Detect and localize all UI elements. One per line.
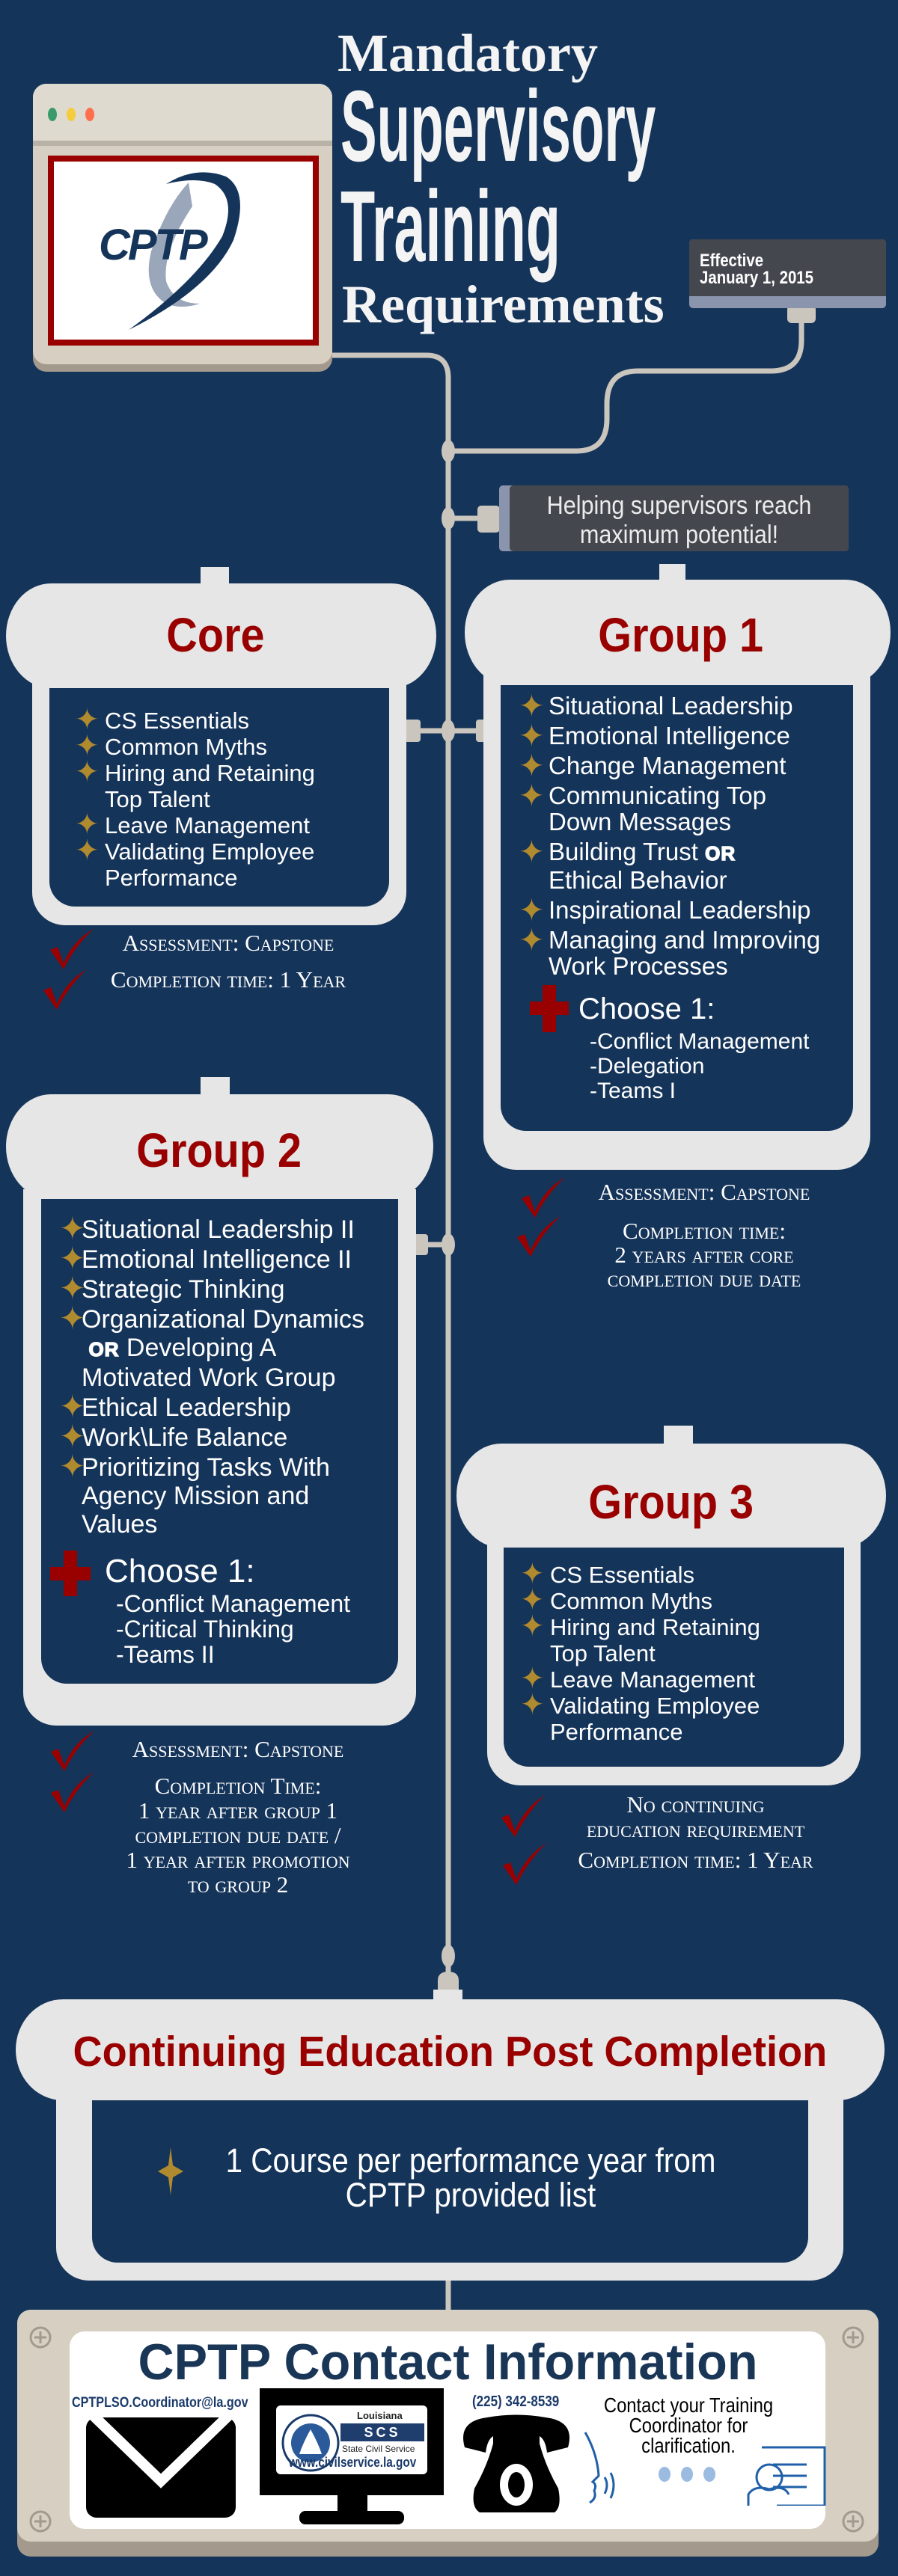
text: course requirement: 1 Course per performance year from xyxy=(225,2141,716,2180)
text: course requirement: CPTP provided list xyxy=(346,2176,596,2214)
list: group 1: Inspirational Leadership xyxy=(549,896,810,924)
heading: contact: CPTP Contact Information xyxy=(138,2334,757,2391)
panel: group 2 xyxy=(6,1077,433,1726)
checks: group 2: Completion Time: xyxy=(155,1773,321,1799)
checks: group 1: completion due date xyxy=(608,1266,801,1292)
text: ✦ xyxy=(59,1390,86,1425)
checks: group 1: Completion time: xyxy=(623,1218,786,1244)
contact: website monitor xyxy=(260,2388,444,2524)
list: group 3 xyxy=(520,1558,760,1745)
list: group 1: Communicating Top xyxy=(549,782,766,809)
list: group 3: Validating Employee xyxy=(550,1693,760,1719)
title: Supervisory xyxy=(340,70,656,183)
text: ✦ xyxy=(520,1558,544,1590)
choose 1: group 2: Choose 1: xyxy=(105,1553,255,1589)
text: ✦ xyxy=(519,749,545,783)
checks: group 2 xyxy=(51,1731,350,1898)
contact: coordinator text: clarification. xyxy=(641,2434,736,2457)
list: group 3: CS Essentials xyxy=(550,1562,694,1588)
list: group 1: Building Trust OR xyxy=(549,838,736,865)
text: ✦ xyxy=(519,893,545,927)
choose 1: group 1: -Delegation xyxy=(590,1054,704,1079)
text: ✦ xyxy=(59,1212,86,1247)
checks: group 2: 1 year after promotion xyxy=(126,1847,350,1873)
list: group 2: Motivated Work Group xyxy=(82,1364,336,1392)
checks: group 2: 1 year after group 1 xyxy=(138,1797,337,1824)
heading: continuing education: Continuing Education Post Completion xyxy=(73,2028,827,2076)
contact: website monitor: State Civil Service xyxy=(342,2444,415,2454)
list: group 1: Situational Leadership xyxy=(549,692,793,720)
choose 1: group 2: -Conflict Management xyxy=(116,1590,350,1617)
heading: core: Core xyxy=(166,608,265,662)
list: group 3: Top Talent xyxy=(550,1640,656,1666)
checks: group 1 xyxy=(517,1177,810,1292)
list: group 2: Organizational Dynamics xyxy=(82,1305,364,1334)
title: Mandatory xyxy=(337,23,598,83)
text: ✦ xyxy=(59,1242,86,1277)
list: group 2: Situational Leadership II xyxy=(82,1215,355,1244)
checks: group 1: Assessment: Capstone xyxy=(599,1179,810,1205)
title: Requirements xyxy=(342,275,665,334)
text: ✦ xyxy=(75,835,99,867)
effective date box: Effective xyxy=(700,251,763,271)
heading: group 2: Group 2 xyxy=(137,1123,302,1177)
list: group 1: Work Processes xyxy=(549,952,728,980)
checks: group 3: education requirement xyxy=(587,1816,804,1842)
choose 1: group 1: -Teams I xyxy=(590,1079,676,1103)
choose 1: group 1: -Conflict Management xyxy=(590,1029,809,1054)
list: core: Validating Employee xyxy=(105,838,314,865)
checks: group 1: 2 years after core xyxy=(614,1242,794,1268)
list: group 1: Managing and Improving xyxy=(549,926,820,954)
contact: website monitor: SCS xyxy=(364,2425,401,2440)
title xyxy=(337,23,665,334)
list: group 2 xyxy=(59,1212,364,1539)
list: core: Leave Management xyxy=(105,812,310,838)
list: group 1: Ethical Behavior xyxy=(549,866,727,894)
list: group 2: OR Developing A xyxy=(88,1334,276,1362)
panel: group 3 xyxy=(456,1426,886,1785)
text: ✦ xyxy=(59,1420,86,1455)
list: group 1: Change Management xyxy=(549,752,786,779)
contact: coordinator text xyxy=(604,2393,773,2457)
text: ✦ xyxy=(75,756,99,788)
text: ✦ xyxy=(520,1663,544,1695)
icon: speaking person xyxy=(584,2432,826,2506)
text: ✦ xyxy=(59,1272,86,1307)
list: group 2: Ethical Leadership xyxy=(82,1393,291,1422)
text: ✦ xyxy=(59,1301,86,1337)
effective date box: January 1, 2015 xyxy=(700,268,813,288)
panel: contact information xyxy=(17,2310,879,2557)
helping callout: maximum potential! xyxy=(580,521,778,549)
checks: group 3 xyxy=(501,1791,813,1885)
checks: group 3: No continuing xyxy=(626,1791,765,1818)
contact: website monitor: www.civilservice.la.gov xyxy=(289,2455,416,2470)
panel: continuing education xyxy=(16,1990,885,2281)
list: group 2: Work\Life Balance xyxy=(82,1423,287,1452)
list: group 3: Common Myths xyxy=(550,1588,712,1614)
list: core: Hiring and Retaining xyxy=(105,760,315,786)
checks: group 2: Assessment: Capstone xyxy=(132,1736,343,1762)
checks: group 2: completion due date / xyxy=(135,1822,341,1848)
choose 1: group 1: Choose 1: xyxy=(578,993,715,1025)
list: group 2: Emotional Intelligence II xyxy=(82,1245,352,1274)
contact: phone: (225) 342-8539 xyxy=(472,2393,559,2410)
list: group 1: Emotional Intelligence xyxy=(549,722,790,749)
checks: group 2: to group 2 xyxy=(188,1871,288,1898)
text: ✦ xyxy=(59,1450,86,1485)
text: ✦ xyxy=(75,809,99,841)
list: group 1 xyxy=(519,689,820,980)
text: ✦ xyxy=(75,704,99,736)
list: group 2: Prioritizing Tasks With xyxy=(82,1453,330,1482)
panel: group 1 xyxy=(465,564,891,1170)
list: core: Top Talent xyxy=(105,786,210,812)
list: group 2: Agency Mission and xyxy=(82,1482,309,1510)
checks: core: Completion time: 1 Year xyxy=(111,966,346,993)
text: course requirement xyxy=(158,2141,716,2214)
choose 1: group 2: -Critical Thinking xyxy=(116,1616,294,1643)
effective date box xyxy=(689,239,886,308)
heading: group 3: Group 3 xyxy=(589,1475,754,1529)
contact: email: CPTPLSO.Coordinator@la.gov xyxy=(72,2395,248,2411)
checks: core: Assessment: Capstone xyxy=(123,930,334,956)
list: group 3: Hiring and Retaining xyxy=(550,1614,760,1640)
list: group 3: Leave Management xyxy=(550,1666,755,1693)
list: group 2: Strategic Thinking xyxy=(82,1275,285,1304)
browser window with CPTP logo xyxy=(33,84,332,372)
panel: core xyxy=(6,567,436,925)
text: ✦ xyxy=(519,719,545,753)
list: group 2: Values xyxy=(82,1510,157,1539)
text: ✦ xyxy=(75,730,99,762)
checks: group 3: Completion time: 1 Year xyxy=(578,1847,813,1873)
list: core: Performance xyxy=(105,865,237,891)
helping callout xyxy=(499,485,849,551)
checks: core xyxy=(43,929,346,1010)
text: ✦ xyxy=(519,835,545,869)
text: ✦ xyxy=(520,1610,544,1643)
text: ✦ xyxy=(519,689,545,723)
contact: coordinator text: Contact your Training xyxy=(604,2393,773,2417)
title: Training xyxy=(340,170,561,283)
helping callout: Helping supervisors reach xyxy=(547,491,811,520)
heading: group 1: Group 1 xyxy=(599,608,763,662)
text: ✦ xyxy=(520,1584,544,1616)
contact: email xyxy=(72,2395,248,2518)
text: ✦ xyxy=(520,1689,544,1721)
choose 1: group 2: -Teams II xyxy=(116,1641,215,1668)
list: core xyxy=(75,704,315,891)
list: core: CS Essentials xyxy=(105,708,249,734)
list: core: Common Myths xyxy=(105,734,267,760)
list: group 3: Performance xyxy=(550,1719,682,1745)
logo: CPTP xyxy=(99,221,206,269)
choose 1: group 2 xyxy=(50,1551,350,1668)
text: ✦ xyxy=(519,779,545,813)
logo xyxy=(48,156,319,346)
choose 1: group 1 xyxy=(530,985,810,1103)
contact: coordinator text: Coordinator for xyxy=(629,2414,748,2437)
contact: phone xyxy=(463,2393,569,2512)
contact: website monitor: Louisiana xyxy=(357,2410,403,2421)
text: ✦ xyxy=(519,923,545,957)
list: group 1: Down Messages xyxy=(549,808,731,835)
